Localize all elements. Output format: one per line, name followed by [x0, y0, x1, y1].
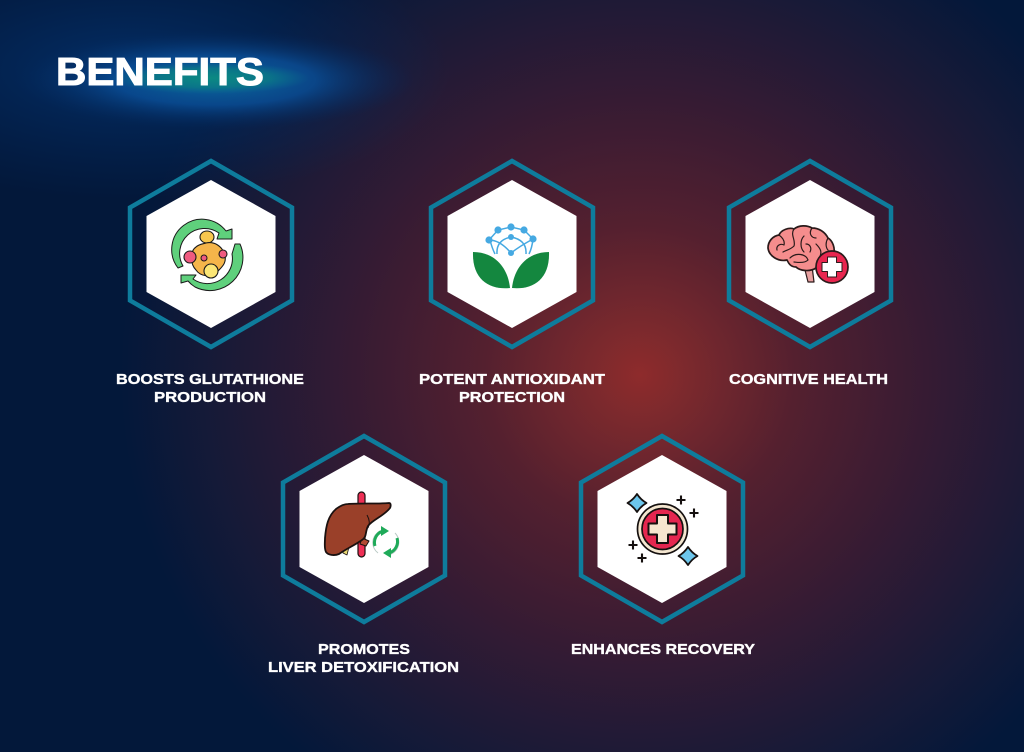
- hexagon badge: [130, 161, 292, 347]
- label: PROMOTES: [318, 642, 410, 658]
- label: BOOSTS GLUTATHIONE: [116, 372, 304, 388]
- label: LIVER DETOXIFICATION: [268, 660, 459, 676]
- icon: brain with medical cross: [768, 226, 848, 283]
- hexagon badge: [283, 436, 445, 622]
- cycle arrows: [373, 526, 399, 558]
- label: PRODUCTION: [154, 390, 266, 406]
- icon: liver with cycle arrows: [325, 492, 399, 558]
- network: [485, 223, 537, 256]
- label: [268, 642, 459, 676]
- panel: cognitive health: [729, 161, 891, 388]
- panel: promotes liver detoxification: [268, 436, 459, 676]
- icon: medical cross with sparkles: [628, 494, 698, 565]
- label: POTENT ANTIOXIDANT: [419, 372, 605, 388]
- hexagon badge: [431, 161, 593, 347]
- label: [116, 372, 304, 406]
- label: PROTECTION: [459, 390, 565, 406]
- icon: leaves with network: [473, 223, 549, 288]
- hexagon badge: [581, 436, 743, 622]
- title: BENEFITS: [56, 51, 264, 94]
- panel: enhances recovery: [571, 436, 755, 658]
- label: [419, 372, 605, 406]
- label: ENHANCES RECOVERY: [571, 642, 755, 658]
- right leaf: [512, 252, 549, 288]
- label: COGNITIVE HEALTH: [729, 372, 888, 388]
- left leaf: [473, 252, 510, 288]
- panel: boosts glutathione production: [116, 161, 304, 406]
- hexagon badge: [729, 161, 891, 347]
- icon: molecule with cycle arrows: [172, 219, 243, 291]
- panel: potent antioxidant protection: [419, 161, 605, 406]
- title glow: [0, 0, 520, 220]
